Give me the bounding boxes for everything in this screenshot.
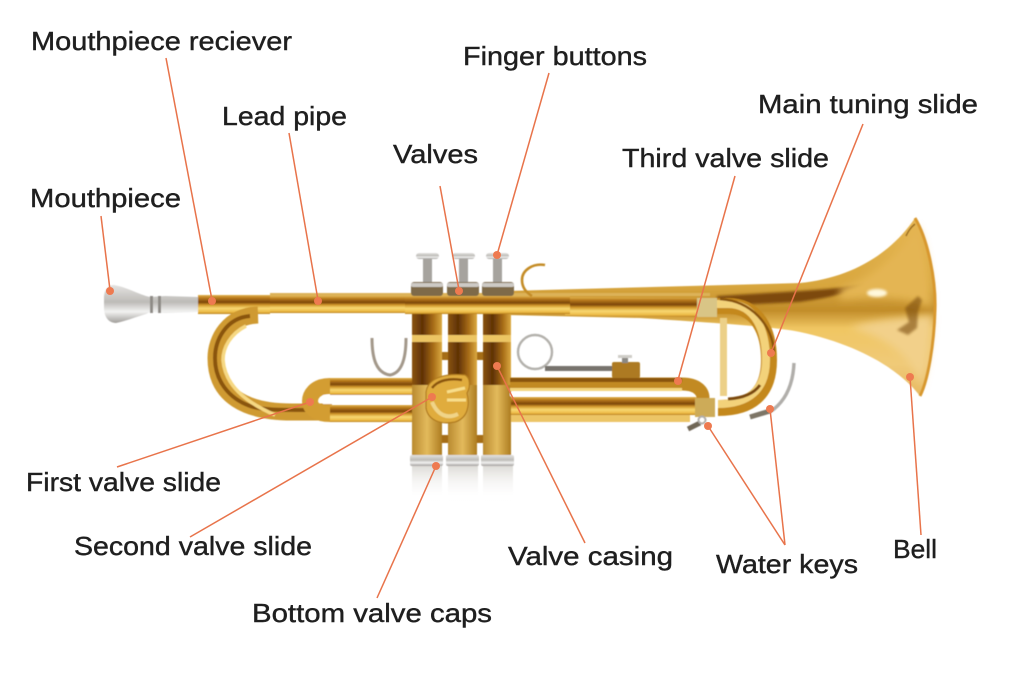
callout: Third valve slide: Third valve slide <box>622 143 829 173</box>
leader <box>906 373 921 535</box>
callout: Mouthpiece <box>30 183 181 295</box>
valve slide ring and lever <box>518 335 640 378</box>
callout: Bottom valve caps <box>252 462 492 628</box>
second valve slide knuckle <box>426 375 469 423</box>
callout: Main tuning slide: Main tuning slide <box>758 89 978 119</box>
bell <box>505 218 935 396</box>
leader <box>704 405 785 545</box>
mouthpiece <box>104 285 198 323</box>
callout: Mouthpiece: Mouthpiece <box>30 183 181 213</box>
leader <box>101 216 114 295</box>
main tuning slide <box>697 298 774 408</box>
trumpet illustration <box>104 218 935 500</box>
callout: Valves <box>393 139 478 295</box>
callout: First valve slide: First valve slide <box>26 467 221 497</box>
callout: Lead pipe: Lead pipe <box>222 101 347 131</box>
callout: Lead pipe <box>222 101 347 305</box>
leader <box>289 133 322 305</box>
callout: Mouthpiece reciever: Mouthpiece reciever <box>31 26 292 56</box>
callout: Valves: Valves <box>393 139 478 169</box>
callout: Water keys: Water keys <box>716 549 858 579</box>
callout: Second valve slide <box>74 393 436 561</box>
first valve slide <box>310 378 425 422</box>
leader <box>190 393 436 537</box>
callout: Finger buttons <box>463 41 647 259</box>
callout: First valve slide <box>26 398 314 497</box>
leader <box>117 398 314 467</box>
callout: Valve casing <box>493 362 673 571</box>
callout: Finger buttons: Finger buttons <box>463 41 647 71</box>
valve cap reflections <box>412 466 513 500</box>
callout: Water keys <box>704 405 858 579</box>
leader <box>377 462 440 598</box>
lower tubes <box>492 397 715 422</box>
callout: Valve casing: Valve casing <box>508 541 673 571</box>
third valve slide <box>510 378 703 398</box>
leader <box>166 58 216 305</box>
lead pipe return loop <box>215 315 332 415</box>
callout: Second valve slide: Second valve slide <box>74 531 312 561</box>
leader <box>493 362 585 543</box>
leader <box>674 176 735 385</box>
finger hook <box>372 338 406 375</box>
callout: Mouthpiece reciever <box>31 26 292 305</box>
callout: Bell <box>893 373 937 564</box>
leader <box>767 124 863 357</box>
leader <box>493 73 549 259</box>
callout: Bottom valve caps: Bottom valve caps <box>252 598 492 628</box>
finger buttons and valve stems <box>416 253 509 283</box>
thumb hook <box>522 265 545 296</box>
leader <box>440 186 463 295</box>
top valve caps <box>411 282 514 296</box>
lead pipe <box>198 293 710 317</box>
tube over valves <box>405 296 570 314</box>
callout: Third valve slide <box>622 143 829 385</box>
water keys <box>688 363 794 429</box>
valve casings <box>412 314 511 459</box>
bottom valve caps <box>410 455 514 466</box>
callout: Bell: Bell <box>893 534 937 564</box>
callout: Main tuning slide <box>758 89 978 357</box>
